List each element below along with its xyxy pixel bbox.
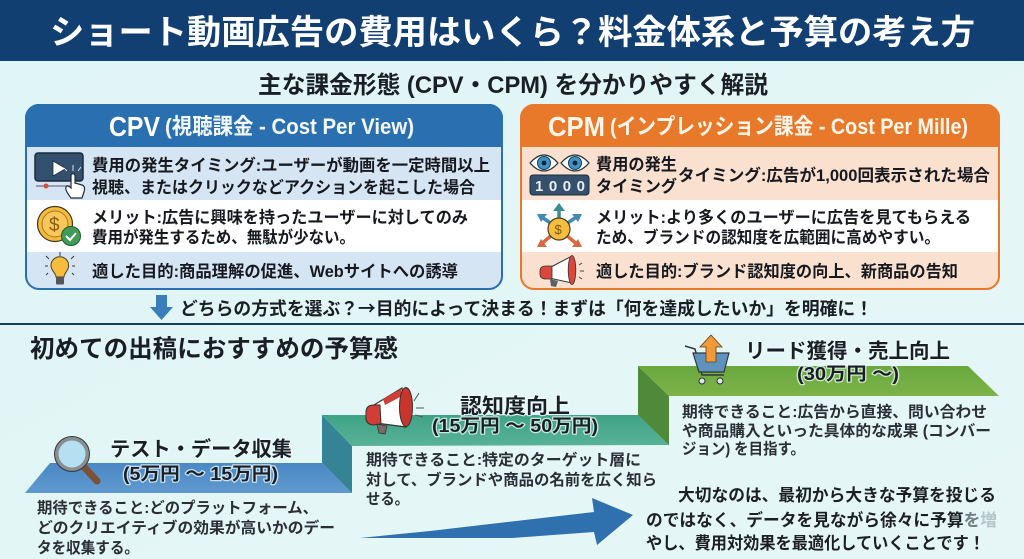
CPV merit text: 費用が発生するため、無駄が少ない。 <box>92 227 355 247</box>
CPV purpose text: 適した目的:商品理解の促進、Webサイトへの誘導 <box>92 261 458 281</box>
CPM timing text: タイミング <box>596 176 677 196</box>
arrow: growth <box>360 498 633 545</box>
riser 2 <box>638 366 669 445</box>
step 2 description: せる。 <box>366 491 409 508</box>
panel: CPM <box>520 104 1000 290</box>
subtitle: 主な課金形態 (CPV・CPM) を分かりやすく解説 <box>258 72 768 99</box>
CPM merit text <box>596 207 971 247</box>
icon: eyes and 1000 counter <box>530 155 589 195</box>
closing message: 大切なのは、最初から大きな予算を投じる <box>678 485 996 505</box>
CPV timing text: 費用の発生タイミング:ユーザーが動画を一定時間以上 <box>92 155 490 175</box>
step 3 label: リード獲得・売上向上 <box>745 339 950 363</box>
CPM timing text <box>596 155 990 196</box>
CPV heading: CPV <box>109 111 160 142</box>
closing message <box>646 485 997 553</box>
step 1 description: どのクリエイティブの効果が高いかのデー <box>37 518 335 537</box>
CPV timing text: 視聴、またはクリックなどアクションを起こした場合 <box>92 178 475 197</box>
icon: cart with up arrow <box>685 335 729 384</box>
step 3 surface <box>638 366 999 396</box>
step 2 label: (15万円 〜 50万円) <box>432 416 598 436</box>
icon: magnifying glass <box>54 436 97 481</box>
step 3 description: ジョン) を目指す。 <box>682 440 805 458</box>
CPM timing text: 費用の発生 <box>596 155 677 174</box>
step 1 description: 期待できること:どのプラットフォーム、 <box>37 499 318 517</box>
panel: CPV <box>25 104 503 290</box>
CPV merit text <box>92 208 468 247</box>
closing message: のではなく、データを見ながら徐々に予算を増 <box>646 510 997 530</box>
CPM heading: CPM <box>548 111 605 142</box>
chart: budget staircase <box>25 366 999 493</box>
title banner: ショート動画広告の費用はいくら？料金体系と予算の考え方 <box>50 14 975 52</box>
CPM timing text: タイミング:広告が1,000回表示された場合 <box>678 165 990 185</box>
icon: megaphone small <box>540 256 584 287</box>
icon: megaphone <box>366 388 424 434</box>
step 1 label: (5万円 〜 15万円) <box>123 464 278 484</box>
decision message: どちらの方式を選ぶ？→目的によって決まる！まずは「何を達成したいか」を明確に！ <box>180 295 873 321</box>
step 2 surface <box>322 415 669 446</box>
icon: light bulb <box>45 252 75 284</box>
CPM merit text: メリット:より多くのユーザーに広告を見てもらえる <box>596 207 971 227</box>
arrow: down <box>150 295 173 320</box>
icon: coin with check: $ <box>49 215 60 236</box>
CPM heading <box>548 111 968 142</box>
step 3 description <box>682 402 991 458</box>
title banner <box>0 0 1024 61</box>
CPV merit text: メリット:広告に興味を持ったユーザーに対してのみ <box>92 208 468 227</box>
icon: video play with cursor <box>35 153 85 198</box>
step 3 description: 期待できること:広告から直接、問い合わせ <box>682 402 987 421</box>
CPM heading: (インプレッション課金 - Cost Per Mille) <box>610 114 968 139</box>
step 1 surface <box>25 463 352 493</box>
step 1 label: テスト・データ収集 <box>110 437 292 461</box>
step 2 description: 期待できること:特定のターゲット層に <box>366 450 641 469</box>
CPV heading: (視聴課金 - Cost Per View) <box>165 114 414 139</box>
icon: coin with radiating arrows <box>537 203 582 247</box>
step 2 label: 認知度向上 <box>460 395 570 418</box>
step 3 label: (30万円 〜) <box>797 364 899 384</box>
step 2 label <box>432 395 598 436</box>
icon: eyes and 1000 counter: 1000 <box>535 178 585 195</box>
step 3 label <box>745 339 950 384</box>
step 2 description: 対して、ブランドや商品の名前を広く知ら <box>366 470 657 489</box>
step 1 description <box>37 499 335 557</box>
step 2 description <box>366 450 657 508</box>
closing message: やし、費用対効果を最適化していくことです！ <box>646 534 985 553</box>
CPM purpose text: 適した目的:ブランド認知度の向上、新商品の告知 <box>596 261 958 281</box>
riser 1 <box>322 415 352 493</box>
step 1 description: タを収集する。 <box>37 539 139 557</box>
icon: coin with radiating arrows: $ <box>554 222 562 237</box>
CPM merit text: ため、ブランドの認知度を広範囲に高めやすい。 <box>596 227 940 247</box>
budget heading: 初めての出稿におすすめの予算感 <box>30 335 398 363</box>
step 1 label <box>110 437 292 484</box>
icon: coin with check <box>38 206 80 246</box>
CPV heading <box>109 111 414 142</box>
CPV timing text <box>92 155 490 197</box>
step 3 description: や商品購入といった具体的な成果 (コンバー <box>682 421 991 440</box>
